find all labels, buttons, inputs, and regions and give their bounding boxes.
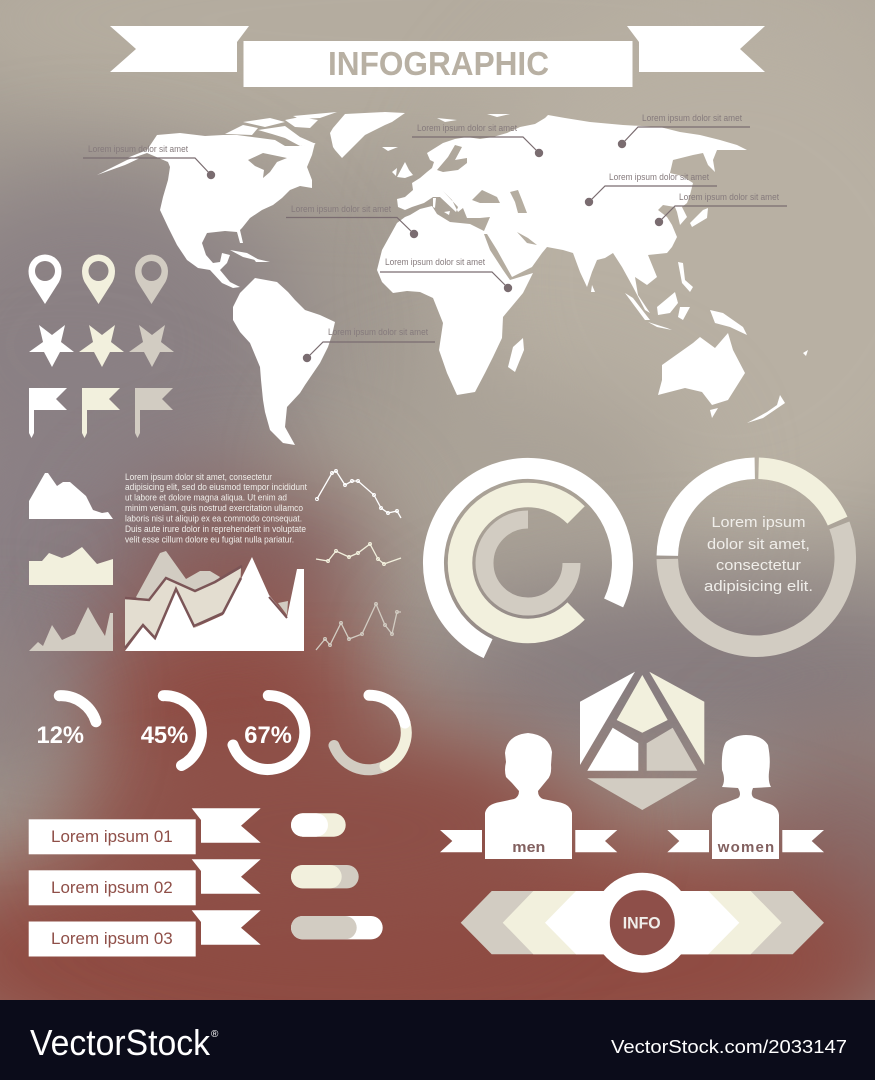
ribbon label 01 xyxy=(29,808,261,854)
map callouts: Lorem ipsum dolor sit amet xyxy=(291,204,391,214)
men figure with ribbon xyxy=(440,733,617,859)
ribbon label 03: Lorem ipsum 03 xyxy=(51,929,173,948)
icons: stars xyxy=(29,325,174,367)
footer bar: ® xyxy=(211,1029,219,1040)
world map xyxy=(97,112,808,445)
men figure with ribbon: men xyxy=(512,839,545,856)
text block: velit esse cillum dolore eu fugiat nulla pariatur. xyxy=(125,534,294,544)
ribbon label 02 xyxy=(29,859,261,905)
progress pill 2 xyxy=(291,865,359,888)
line chart: white xyxy=(316,470,401,518)
ribbon label 01: Lorem ipsum 01 xyxy=(51,827,173,846)
gauge: 67% xyxy=(233,696,305,769)
gauge: 45% xyxy=(141,696,201,766)
small area charts xyxy=(29,473,113,651)
line chart: cream xyxy=(316,542,401,566)
map callouts: Lorem ipsum dolor sit amet xyxy=(609,172,709,182)
gauge: 12% xyxy=(36,696,96,749)
info arrow banner: INFO xyxy=(623,914,661,932)
map callouts: Lorem ipsum dolor sit amet xyxy=(679,192,779,202)
text block: minim veniam, quis nostrud exercitation ullamco xyxy=(125,503,303,513)
map callouts: Lorem ipsum dolor sit amet xyxy=(642,113,742,123)
progress pill 3 xyxy=(291,916,383,939)
footer bar: VectorStock.com/2033147 xyxy=(611,1037,847,1057)
segmented ring with text xyxy=(667,468,845,646)
gauge: 45%: 45% xyxy=(141,722,188,749)
hexagon diagram xyxy=(580,672,704,810)
women figure with ribbon xyxy=(667,735,824,859)
ribbon label 03 xyxy=(29,910,261,956)
text block: Duis aute irure dolor in reprehenderit in voluptate xyxy=(125,524,306,534)
text block: ut labore et dolore magna aliqua. Ut enim ad xyxy=(125,492,287,502)
progress pill 1 xyxy=(291,813,346,837)
gauge: three colours xyxy=(334,695,406,770)
icons: flags xyxy=(29,388,173,438)
title banner: INFOGRAPHIC xyxy=(328,45,549,82)
title banner xyxy=(110,26,765,87)
gauge: 12%: 12% xyxy=(36,722,84,749)
text block: Lorem ipsum dolor sit amet, consectetur xyxy=(125,472,272,482)
map callouts xyxy=(83,113,787,362)
text block: laboris nisi ut aliquip ex ea commodo consequat. xyxy=(125,514,302,524)
segmented ring with text: dolor sit amet, xyxy=(707,536,810,553)
text block: adipisicing elit, sed do eiusmod tempor incididunt xyxy=(125,482,307,492)
icons: map pins xyxy=(28,254,168,304)
info arrow banner xyxy=(461,873,824,973)
text block xyxy=(125,472,307,544)
women figure with ribbon: women xyxy=(717,839,774,856)
segmented ring with text: adipisicing elit. xyxy=(704,578,813,595)
footer bar: VectorStock xyxy=(30,1022,211,1063)
segmented ring with text: Lorem ipsum xyxy=(712,514,806,531)
map callouts: Lorem ipsum dolor sit amet xyxy=(417,123,517,133)
large layered area chart xyxy=(125,551,304,651)
map callouts: Lorem ipsum dolor sit amet xyxy=(385,257,485,267)
segmented ring with text: consectetur xyxy=(716,557,801,574)
gauge: 67%: 67% xyxy=(244,722,292,749)
concentric ring chart xyxy=(433,468,622,649)
footer bar xyxy=(0,1000,875,1080)
ribbon label 02: Lorem ipsum 02 xyxy=(51,878,173,897)
map callouts: Lorem ipsum dolor sit amet xyxy=(328,327,428,337)
map callouts: Lorem ipsum dolor sit amet xyxy=(88,144,188,154)
line chart: taupe xyxy=(316,602,401,650)
